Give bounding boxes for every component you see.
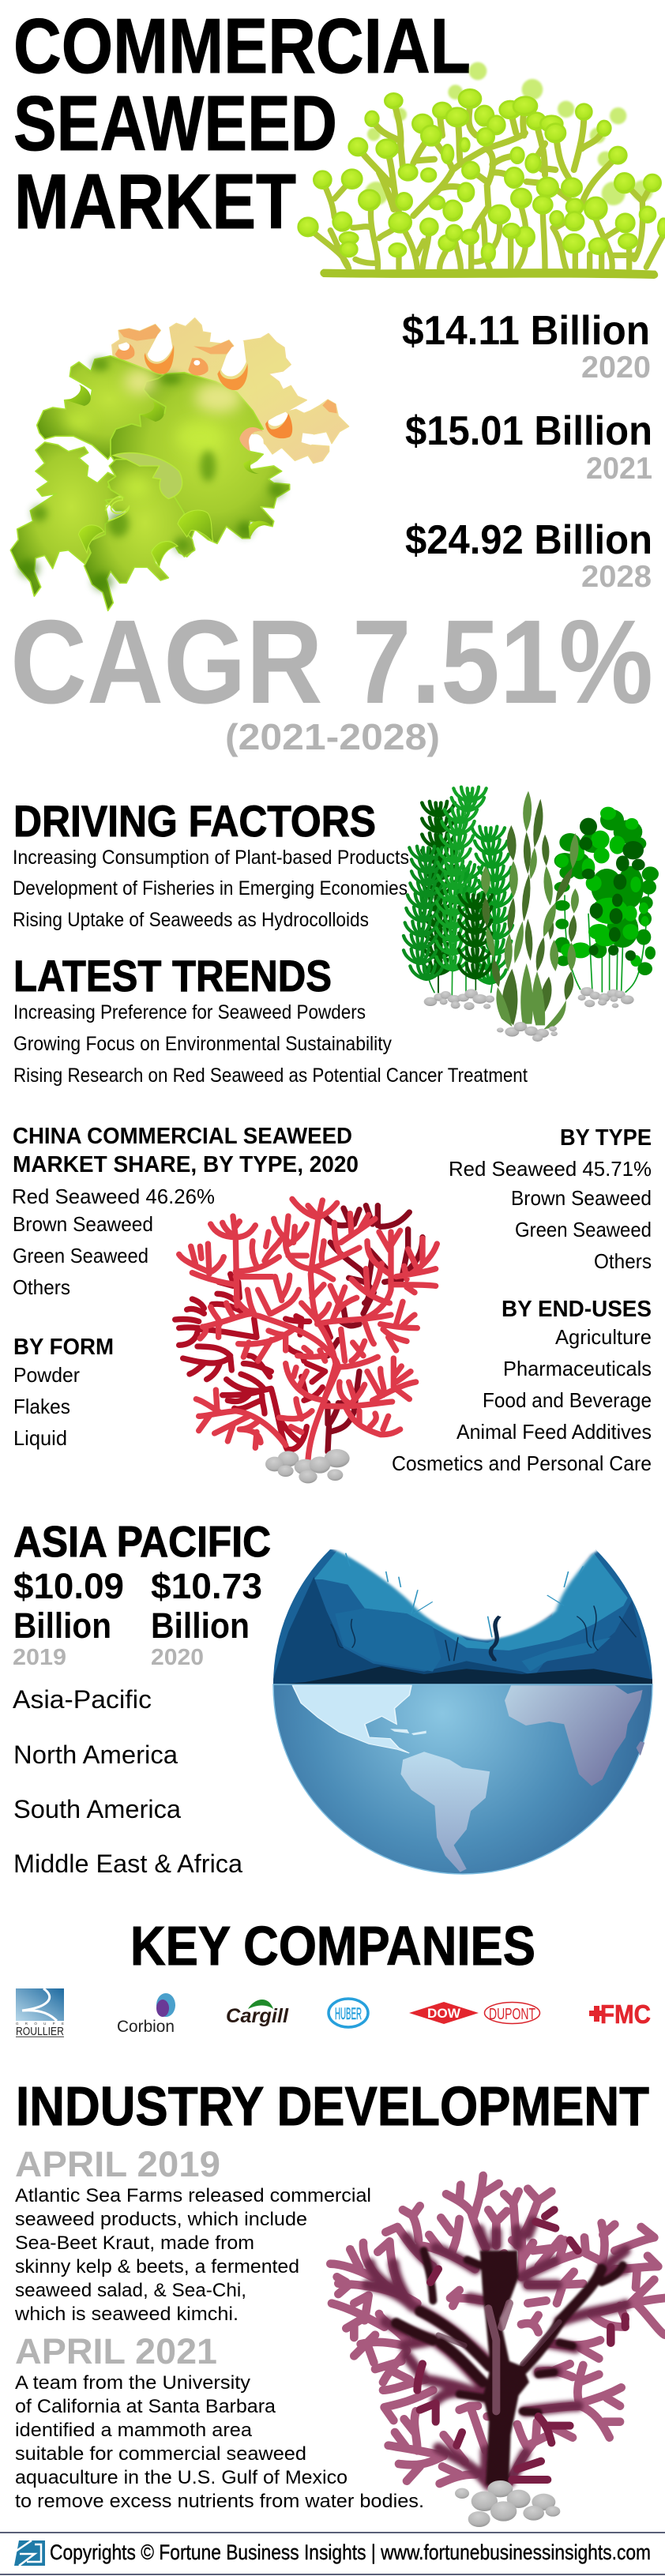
text block: april 2019: Atlantic Sea Farms released commercial xyxy=(15,2185,371,2206)
panel: driving factors xyxy=(13,796,409,931)
list: regions: North America xyxy=(13,1740,178,1769)
panel: by form xyxy=(13,1335,114,1450)
panel: driving factors: Development of Fisheries in Emerging Economies xyxy=(13,877,408,899)
CAGR headline: (2021-2028) xyxy=(225,716,440,757)
panel: by end-uses: Cosmetics and Personal Care xyxy=(392,1451,652,1475)
stat: 2028 market size: 2028 xyxy=(581,560,652,594)
stat: asia pacific 2020: 2020 xyxy=(151,1645,204,1670)
text block: april 2021 xyxy=(15,2331,424,2512)
title: COMMERCIAL xyxy=(13,2,471,89)
list: regions: South America xyxy=(13,1795,181,1823)
panel: by end-uses: Food and Beverage xyxy=(483,1388,652,1412)
text block: april 2021: to remove excess nutrients from water bodies. xyxy=(15,2491,424,2512)
illustration: three green aquatic plants xyxy=(404,787,659,1042)
text block: april 2021: identified a mammoth area xyxy=(15,2420,252,2441)
panel: latest trends xyxy=(13,951,528,1087)
logo: roullier: ROULLIER xyxy=(16,2025,64,2038)
logo: cargill: Cargill xyxy=(226,2005,289,2027)
stat: asia pacific 2019: Billion xyxy=(13,1605,111,1646)
stat: 2021 market size: 2021 xyxy=(586,452,652,486)
panel: latest trends: Growing Focus on Environmental Sustainability xyxy=(13,1033,392,1055)
panel: driving factors: Rising Uptake of Seaweeds as Hydrocolloids xyxy=(13,909,369,931)
stat: asia pacific 2019: 2019 xyxy=(13,1645,66,1670)
panel: latest trends: Increasing Preference for Seaweed Powders xyxy=(13,1001,366,1023)
panel: by end-uses: Pharmaceuticals xyxy=(503,1357,652,1380)
heading: key companies: KEY COMPANIES xyxy=(130,1915,535,1977)
panel: china market share by type xyxy=(12,1124,359,1299)
illustration: curly lettuce seaweed xyxy=(10,318,349,610)
list: regions xyxy=(13,1685,242,1878)
panel: china market share by type: Others xyxy=(13,1275,70,1299)
panel: by form: Powder xyxy=(13,1363,80,1387)
illustration: globe with undersea scene xyxy=(272,1549,653,1875)
stat: 2020 market size: $14.11 Billion xyxy=(402,308,650,354)
text block: april 2021: A team from the University xyxy=(15,2372,251,2394)
panel: by type xyxy=(449,1125,652,1273)
logo: corbion xyxy=(117,1993,175,2036)
panel: latest trends: LATEST TRENDS xyxy=(13,951,332,1001)
stat: asia pacific 2020 xyxy=(151,1566,262,1670)
logo: dupont xyxy=(485,2003,540,2023)
logo: fmc: FMC xyxy=(600,2000,651,2029)
text block: april 2021: aquaculture in the U.S. Gulf of Mexico xyxy=(15,2467,348,2488)
panel: latest trends: Rising Research on Red Seaweed as Potential Cancer Treatment xyxy=(13,1065,528,1087)
text block: april 2021: suitable for commercial seaweed xyxy=(15,2443,306,2465)
text block: april 2019: seaweed salad, & Sea-Chi, xyxy=(15,2280,246,2301)
stat: asia pacific 2020: Billion xyxy=(151,1605,250,1646)
illustration: green seaweed with round tips xyxy=(299,62,665,279)
text block: april 2019: which is seaweed kimchi. xyxy=(14,2304,239,2325)
stat: 2021 market size: $15.01 Billion xyxy=(405,408,652,454)
logo: roullier xyxy=(16,1988,64,2038)
panel: china market share by type: CHINA COMMERCIAL SEAWEED xyxy=(13,1124,352,1149)
panel: china market share by type: MARKET SHARE, BY TYPE, 2020 xyxy=(13,1152,359,1177)
panel: by end-uses: Animal Feed Additives xyxy=(456,1420,652,1444)
text block: april 2019: skinny kelp & beets, a fermented xyxy=(15,2256,299,2277)
list: regions: Asia-Pacific xyxy=(13,1685,152,1714)
panel: by end-uses: BY END-USES xyxy=(502,1297,652,1322)
panel: by form: Liquid xyxy=(13,1426,67,1450)
title: SEAWEED xyxy=(13,80,337,167)
logo: corbion: Corbion xyxy=(117,2018,175,2036)
panel: by type: Green Seaweed xyxy=(515,1218,652,1241)
logo: dow xyxy=(409,2002,479,2024)
stat: 2028 market size xyxy=(405,517,652,594)
text block: april 2019 xyxy=(14,2144,371,2325)
logo: roullier: GROUPE xyxy=(16,2022,64,2026)
panel: china market share by type: Green Seaweed xyxy=(13,1244,148,1267)
icon: fortune business insights logo xyxy=(14,2540,45,2566)
south america xyxy=(400,1752,490,1872)
panel: driving factors: DRIVING FACTORS xyxy=(13,796,376,846)
stat: 2021 market size xyxy=(405,408,652,486)
undersea upper half xyxy=(273,1549,652,1684)
caribbean islands xyxy=(390,1729,426,1735)
africa xyxy=(505,1685,643,1786)
heading: asia pacific: ASIA PACIFIC xyxy=(13,1517,271,1566)
text block: april 2019: APRIL 2019 xyxy=(15,2144,220,2184)
panel: by end-uses xyxy=(392,1297,652,1475)
logo: huber xyxy=(329,1999,368,2027)
text block: april 2021: of California at Santa Barbara xyxy=(15,2396,276,2417)
panel: china market share by type: Brown Seaweed xyxy=(13,1212,153,1236)
north america xyxy=(293,1685,411,1753)
panel: by form: BY FORM xyxy=(13,1335,114,1360)
panel: by form: Flakes xyxy=(13,1395,70,1418)
list: regions: Middle East & Africa xyxy=(13,1849,242,1878)
panel: driving factors: Increasing Consumption of Plant-based Products xyxy=(13,847,409,869)
illustration: red coral seaweed xyxy=(175,1199,437,1483)
panel: by type: Red Seaweed 45.71% xyxy=(449,1157,652,1181)
title xyxy=(13,2,471,245)
text block: april 2021: APRIL 2021 xyxy=(15,2331,217,2371)
title: MARKET xyxy=(14,158,296,245)
panel: by end-uses: Agriculture xyxy=(555,1325,652,1349)
footer bar xyxy=(0,2532,665,2575)
logo: dupont: DUPONT xyxy=(489,2006,535,2023)
stat: 2028 market size: $24.92 Billion xyxy=(405,517,652,563)
ocean lower half xyxy=(273,1684,652,1874)
panel: china market share by type: Red Seaweed 46.26% xyxy=(12,1185,215,1208)
panel: by type: Others xyxy=(594,1249,652,1273)
illustration: purple branching seaweed xyxy=(330,2176,665,2527)
panel: by type: Brown Seaweed xyxy=(511,1186,652,1210)
panel: by type: BY TYPE xyxy=(560,1125,652,1151)
stat: 2020 market size: 2020 xyxy=(581,351,651,385)
logo: dow: DOW xyxy=(427,2006,461,2021)
text block: april 2019: Sea-Beet Kraut, made from xyxy=(15,2232,254,2254)
stat: asia pacific 2019 xyxy=(13,1566,124,1670)
stat: asia pacific 2019: $10.09 xyxy=(13,1566,124,1606)
stat: asia pacific 2020: $10.73 xyxy=(151,1566,262,1606)
stat: 2020 market size xyxy=(402,308,651,385)
text block: april 2019: seaweed products, which include xyxy=(15,2209,307,2230)
logo: huber: HUBER xyxy=(335,2005,362,2023)
